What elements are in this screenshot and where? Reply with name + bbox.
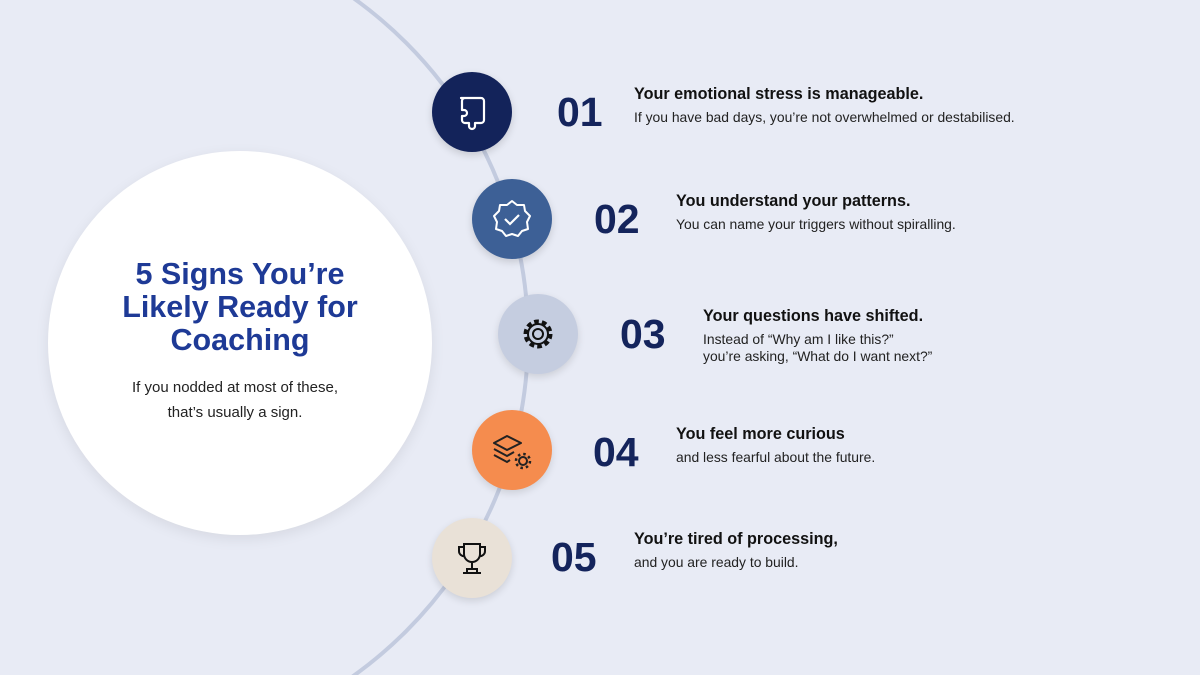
title: 5 Signs You’re	[135, 257, 345, 291]
subtitle	[132, 379, 338, 421]
item 02: You can name your triggers without spiralling.	[676, 216, 956, 232]
title	[122, 257, 358, 357]
icon: badge check	[472, 179, 552, 259]
item 04: 04	[593, 429, 639, 475]
subtitle: that’s usually a sign.	[168, 404, 302, 421]
item 05: 05	[551, 534, 597, 580]
item 02	[594, 192, 956, 242]
item 04	[593, 425, 875, 475]
item 03: you’re asking, “What do I want next?”	[703, 348, 932, 364]
item 03	[620, 307, 932, 364]
item 01: Your emotional stress is manageable.	[634, 85, 923, 103]
item 01: 01	[557, 89, 603, 135]
item 02: 02	[594, 196, 640, 242]
item 03: Your questions have shifted.	[703, 307, 923, 325]
subtitle: If you nodded at most of these,	[132, 379, 338, 396]
icon: trophy	[432, 518, 512, 598]
title: Coaching	[171, 323, 309, 357]
item 04: You feel more curious	[676, 425, 845, 443]
panel: title circle	[48, 151, 432, 535]
item 04: and less fearful about the future.	[676, 449, 875, 465]
item 01	[557, 85, 1015, 135]
item 05: and you are ready to build.	[634, 554, 798, 570]
icon: gear	[498, 294, 578, 374]
item 05: You’re tired of processing,	[634, 530, 838, 548]
icon: puzzle	[432, 72, 512, 152]
title: Likely Ready for	[122, 290, 358, 324]
item 03: Instead of “Why am I like this?”	[703, 331, 894, 347]
icon: layers gear	[472, 410, 552, 490]
item 03: 03	[620, 311, 666, 357]
item 01: If you have bad days, you’re not overwhelmed or destabilised.	[634, 109, 1015, 125]
item 05	[551, 530, 838, 580]
item 02: You understand your patterns.	[676, 192, 910, 210]
